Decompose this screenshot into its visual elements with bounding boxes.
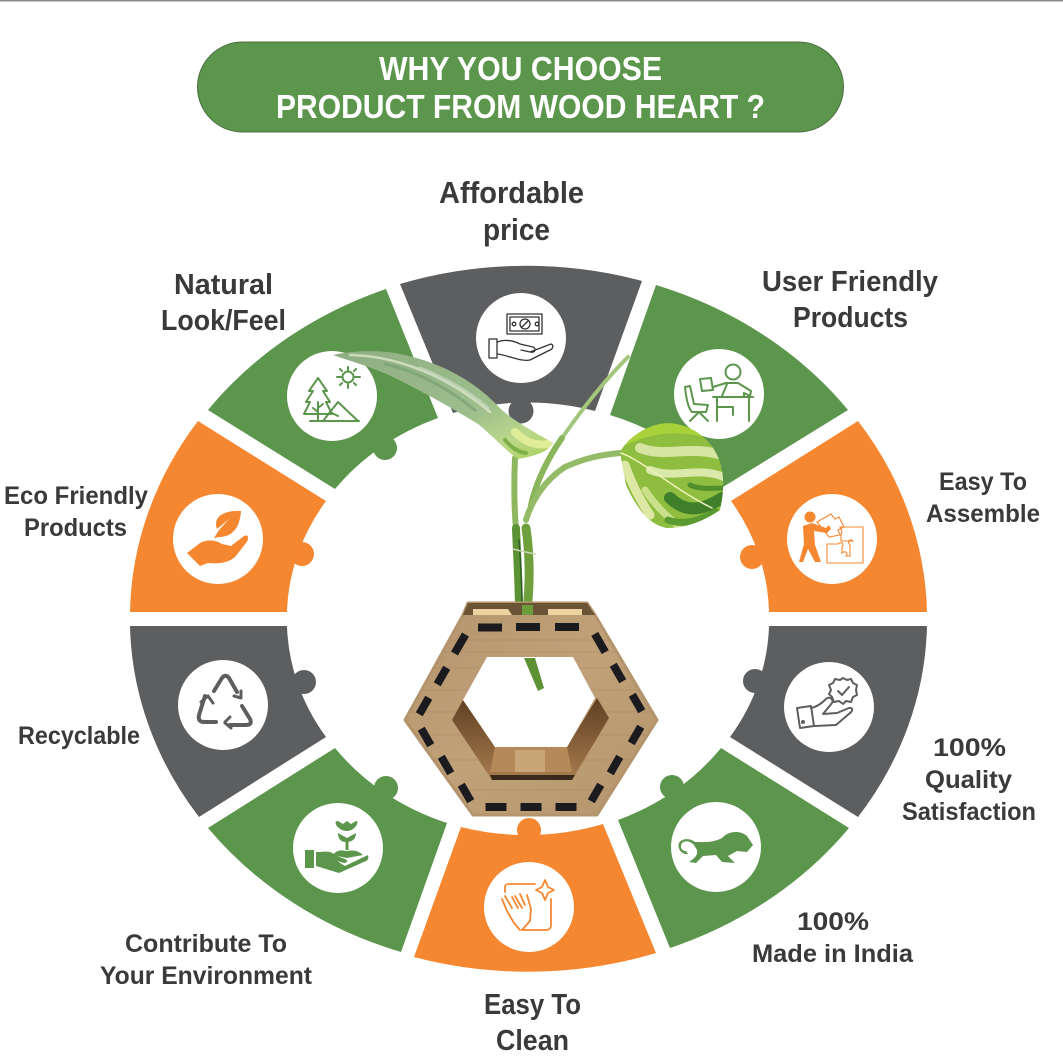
segment: recyclable bbox=[130, 626, 326, 817]
window bbox=[463, 657, 595, 747]
label: quality satisfaction: Satisfaction bbox=[902, 798, 1036, 826]
label: affordable price: Affordable bbox=[439, 175, 584, 210]
label: natural look/feel bbox=[161, 269, 286, 337]
segment: quality satisfaction bbox=[730, 626, 927, 817]
icon: plant in hand bbox=[305, 821, 368, 873]
icon: tree and sun bbox=[304, 367, 360, 421]
label: natural look/feel: Natural bbox=[174, 269, 273, 301]
label: user friendly products: Products bbox=[793, 302, 908, 334]
label: made in india: 100% bbox=[797, 908, 869, 936]
icon: money in hand bbox=[489, 314, 553, 360]
icon: lion bbox=[679, 832, 753, 863]
label: made in india bbox=[752, 908, 914, 968]
left leaf bbox=[333, 351, 553, 459]
label: easy to assemble: Easy To bbox=[939, 468, 1027, 496]
label: easy to assemble bbox=[926, 468, 1040, 528]
icon: leaf in hand bbox=[187, 511, 248, 566]
label: made in india: Made in India bbox=[752, 940, 914, 968]
label: affordable price: price bbox=[483, 212, 550, 247]
label: affordable price bbox=[439, 175, 584, 247]
segment: contribute to environment bbox=[208, 748, 447, 952]
recess bbox=[452, 698, 609, 780]
segment: natural look bbox=[208, 289, 438, 489]
title banner: PRODUCT FROM WOOD HEART ? bbox=[276, 88, 765, 125]
segment: user friendly bbox=[610, 285, 848, 487]
right leaf bbox=[620, 423, 726, 528]
segment: easy to clean bbox=[414, 818, 656, 972]
label: contribute to your environment: Your Environment bbox=[100, 962, 313, 990]
label: recyclable: Recyclable bbox=[18, 722, 140, 750]
product: hexagon wooden planter with plant bbox=[333, 351, 726, 815]
wood frame bbox=[405, 603, 657, 815]
label: contribute to your environment: Contribute To bbox=[125, 930, 287, 958]
segment: made in india bbox=[618, 748, 849, 948]
label: quality satisfaction: 100% bbox=[933, 734, 1006, 762]
label: natural look/feel: Look/Feel bbox=[161, 305, 286, 337]
label: eco friendly products: Eco Friendly bbox=[4, 482, 148, 510]
label: eco friendly products: Products bbox=[24, 514, 127, 542]
wood slots bbox=[416, 623, 645, 811]
segment: eco friendly bbox=[130, 421, 326, 612]
label: quality satisfaction bbox=[902, 734, 1036, 826]
title banner: WHY YOU CHOOSE bbox=[379, 50, 662, 87]
label: user friendly products: User Friendly bbox=[762, 266, 938, 298]
segment: affordable price bbox=[400, 266, 642, 424]
icon: person assembling puzzle bbox=[799, 512, 863, 563]
icon: cleaning hands and sparkle bbox=[502, 880, 554, 930]
label: eco friendly products bbox=[4, 482, 148, 542]
label: contribute to your environment bbox=[100, 930, 313, 990]
icon: person at desk bbox=[685, 364, 753, 421]
label: easy to clean bbox=[484, 989, 581, 1057]
label: easy to clean: Clean bbox=[496, 1025, 569, 1057]
plant stems bbox=[513, 357, 628, 612]
icon: quality badge on hand bbox=[797, 678, 857, 728]
label: quality satisfaction: Quality bbox=[925, 766, 1012, 794]
icon: recycle arrows bbox=[199, 676, 251, 728]
label: easy to assemble: Assemble bbox=[926, 500, 1040, 528]
title banner bbox=[198, 42, 844, 132]
segment: easy to assemble bbox=[731, 421, 927, 612]
label: user friendly products bbox=[762, 266, 938, 334]
label: easy to clean: Easy To bbox=[484, 989, 581, 1021]
